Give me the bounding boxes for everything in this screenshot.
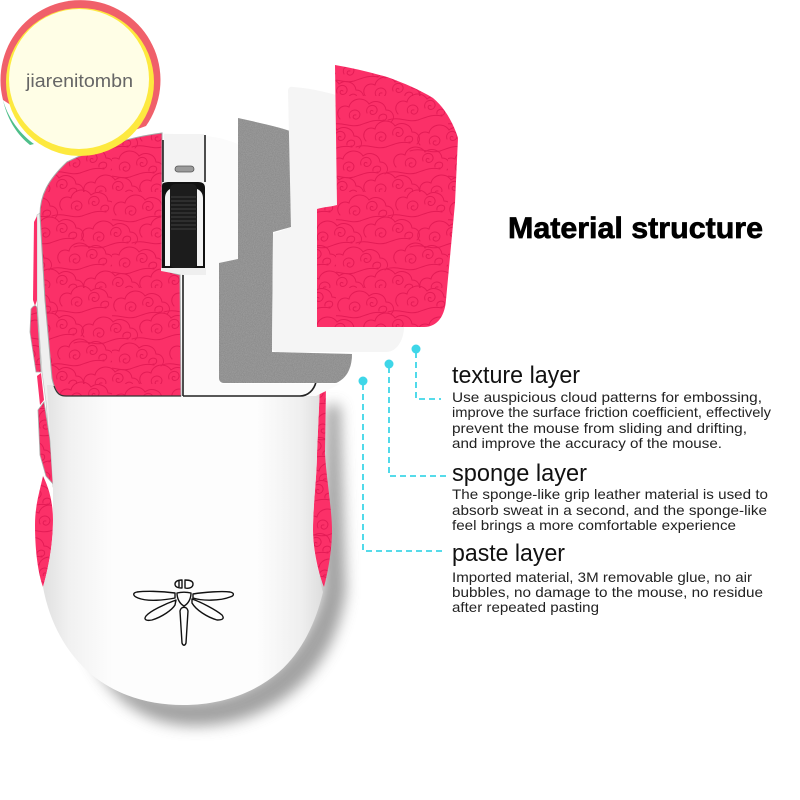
mouse body shell bbox=[43, 385, 323, 705]
pad bottom edge bbox=[54, 386, 181, 396]
paste leader bbox=[358, 376, 446, 551]
paste layer bbox=[219, 118, 352, 383]
text block: texture layer: improve the surface friction coefficient, effectively bbox=[452, 404, 771, 420]
texture leader bbox=[412, 344, 441, 399]
text block: sponge layer: sponge layer bbox=[452, 460, 587, 487]
text block: sponge layer: absorb sweat in a second, and the sponge-like bbox=[452, 502, 767, 518]
texture layer bbox=[317, 65, 458, 327]
text block: paste layer: paste layer bbox=[452, 540, 565, 567]
text block: texture layer: prevent the mouse from sliding and drifting, bbox=[452, 420, 747, 436]
sponge layer bbox=[272, 87, 404, 352]
left rail bbox=[37, 213, 64, 487]
mouse drop shadow bbox=[75, 405, 346, 726]
scroll wheel housing bbox=[161, 134, 206, 275]
text block: paste layer: Imported material, 3M removable glue, no air bbox=[452, 569, 752, 585]
mouse illustration bbox=[30, 133, 346, 726]
text block: sponge layer: The sponge-like grip leather material is used to bbox=[452, 486, 768, 502]
text block: sponge layer: feel brings a more comfortable experience bbox=[452, 517, 736, 533]
logo: dragonfly bbox=[134, 580, 233, 645]
text block: paste layer bbox=[452, 540, 763, 615]
dragonfly wings bbox=[134, 591, 233, 620]
left grip strips bbox=[30, 216, 53, 587]
text block: paste layer: bubbles, no damage to the mouse, no residue bbox=[452, 584, 763, 600]
main button top panel bbox=[160, 133, 340, 396]
left texture pad bbox=[40, 133, 181, 396]
button seam bbox=[183, 268, 316, 396]
callout leaders bbox=[358, 344, 446, 551]
right grip strip bbox=[313, 384, 332, 587]
text block: texture layer: Use auspicious cloud patterns for embossing, bbox=[452, 389, 762, 405]
sponge leader bbox=[384, 360, 446, 476]
dragonfly tail bbox=[180, 607, 188, 645]
badge label: jiarenitombn bbox=[25, 71, 133, 91]
text block: paste layer: after repeated pasting bbox=[452, 599, 599, 615]
scroll wheel bbox=[170, 184, 197, 268]
text block: texture layer: texture layer bbox=[452, 362, 580, 389]
dragonfly eyes bbox=[175, 580, 193, 588]
text block: texture layer: and improve the accuracy of the mouse. bbox=[452, 435, 722, 451]
title: Material structure bbox=[508, 212, 763, 245]
dragonfly thorax bbox=[177, 592, 191, 606]
brand badge bbox=[0, 0, 160, 156]
text block: texture layer bbox=[452, 362, 771, 451]
text block: sponge layer bbox=[452, 460, 768, 533]
